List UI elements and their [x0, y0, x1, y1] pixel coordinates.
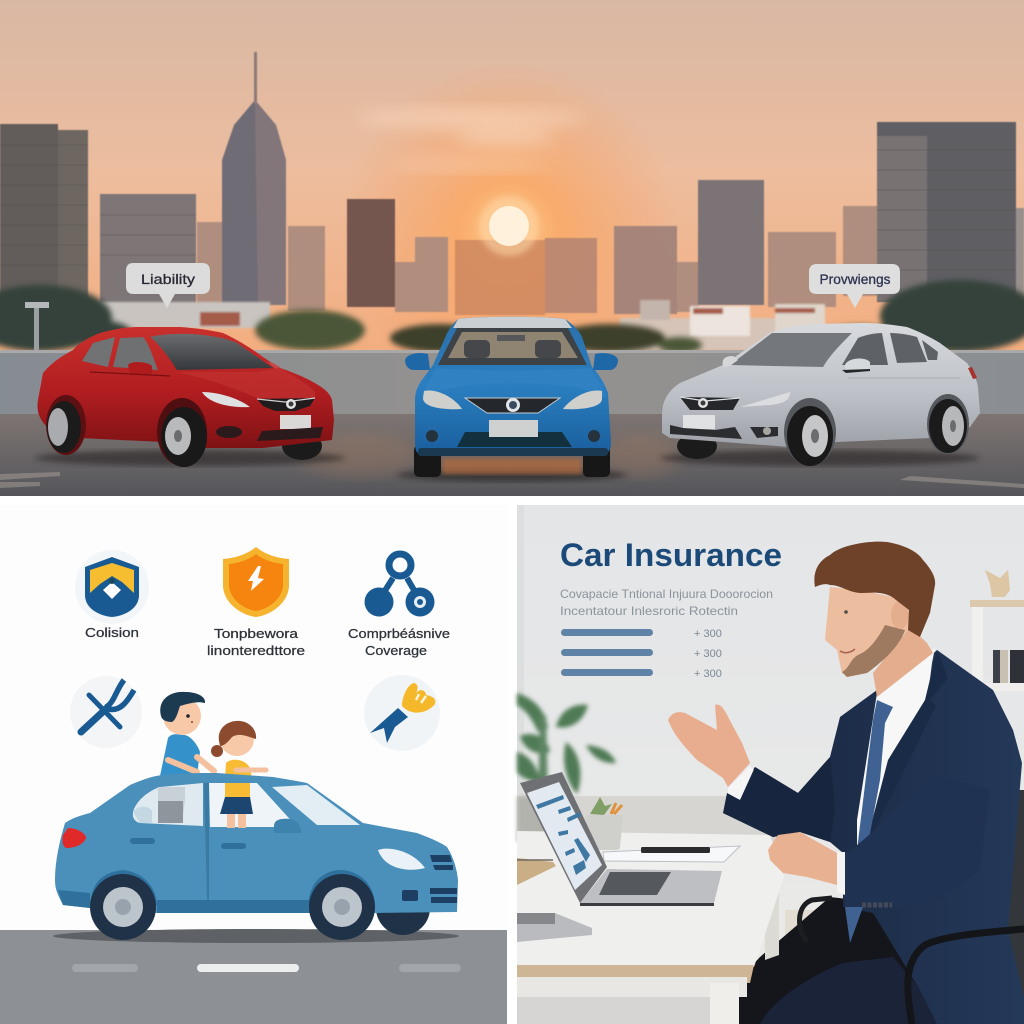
illustration: children behind car — [160, 692, 266, 778]
laptop — [520, 772, 722, 906]
neck — [873, 627, 933, 697]
small potted plant — [586, 797, 623, 850]
label: Comprehensive Coverage — [348, 626, 450, 658]
panel: coverage icons and family car — [0, 505, 507, 1024]
front sleeve — [845, 775, 990, 907]
list: coverage bars with amounts: + 300 — [694, 648, 722, 660]
sun — [479, 196, 539, 256]
trousers behind desk — [680, 897, 950, 1024]
shelf — [970, 570, 1024, 691]
armrest — [908, 929, 1024, 1024]
road — [0, 929, 507, 1024]
face — [825, 587, 910, 677]
lamp post — [25, 302, 49, 354]
jacket — [723, 650, 1024, 1024]
label: Temporary: Tonpbewora — [214, 626, 299, 641]
hair — [814, 542, 935, 637]
cuff — [728, 766, 756, 800]
speech bubble: Providers — [809, 264, 900, 308]
parapet wall — [0, 352, 1024, 414]
speech bubble: Liability: Liability — [141, 271, 195, 287]
list: coverage bars with amounts: + 300 — [694, 628, 722, 640]
icon: crossed tools — [70, 676, 142, 748]
text block: description: Incentatour Inlesroric Rotectin — [560, 604, 738, 618]
beard — [842, 625, 905, 677]
ear — [891, 601, 909, 629]
icon: collision shield — [75, 550, 149, 624]
sleeve — [723, 757, 835, 842]
icon: yellow brush tool — [364, 675, 440, 751]
lower hand — [768, 832, 837, 885]
dress pants — [760, 957, 950, 1024]
list: coverage bars with amounts: + 300 — [694, 668, 722, 680]
car: blue sedan — [405, 317, 618, 477]
label: Temporary: linonteredttore — [207, 643, 305, 658]
lapel — [864, 650, 948, 852]
heading: Car Insurance: Car Insurance — [560, 537, 782, 573]
lower cuff — [837, 852, 845, 895]
skyline — [0, 52, 1024, 315]
list: coverage bars with amounts — [561, 628, 722, 680]
car: silver sedan — [662, 323, 980, 466]
illustration: blue family car — [55, 773, 458, 940]
parking lot — [0, 414, 1024, 496]
agent: man in suit — [668, 542, 1024, 1024]
speech bubble: Liability — [126, 263, 210, 308]
icon: linked nodes — [364, 554, 434, 616]
low buildings and trees — [95, 300, 825, 350]
panel: sunset photo with three cars — [0, 0, 1024, 496]
shirt — [857, 648, 935, 850]
panel: office with agent — [517, 505, 1024, 1024]
chair — [800, 790, 1024, 1005]
plant — [517, 693, 616, 795]
tie — [845, 700, 893, 943]
clouds — [355, 108, 585, 169]
label: Collision: Colision — [85, 625, 139, 640]
icon: orange shield — [223, 547, 289, 617]
text block: description — [560, 587, 773, 618]
label: Comprehensive Coverage: Coverage — [365, 643, 427, 658]
speech bubble: Providers: Provwiengs — [820, 271, 890, 287]
label: Comprehensive Coverage: Comprbéásnive — [348, 626, 450, 641]
text block: description: Covapacie Tntional Injuura Dooorocion — [560, 587, 773, 601]
desk — [517, 831, 784, 1024]
car: red sedan — [37, 327, 334, 467]
raised hand — [668, 705, 750, 787]
label: Temporary — [207, 626, 305, 658]
